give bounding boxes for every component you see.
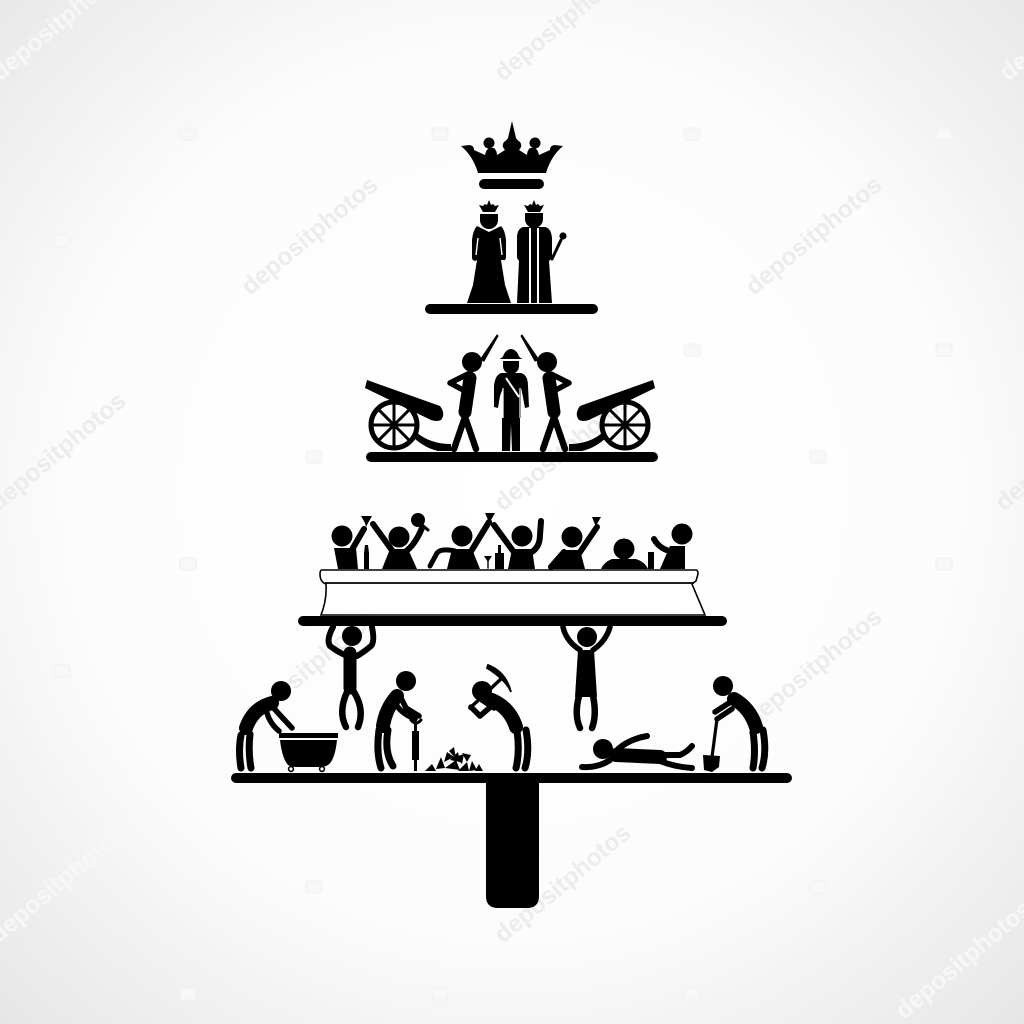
- figure: left soldier with rifle: [450, 335, 498, 449]
- diner 6 seated: [601, 538, 648, 569]
- watermark text: depositphotos: [237, 603, 383, 733]
- watermark text: depositphotos: [490, 387, 636, 517]
- figure: worker with pickaxe: [470, 665, 528, 768]
- figure: worker with jackhammer: [378, 671, 419, 768]
- table: [320, 570, 705, 615]
- figure: worker hanging from platform, right: [563, 627, 610, 728]
- tier 3 platform: [298, 616, 727, 626]
- watermark camera marks: [54, 128, 952, 1000]
- tier 1 platform: [425, 304, 598, 314]
- diner 5 with glass: [551, 517, 601, 569]
- banquet figures: [332, 513, 692, 569]
- icon: left cannon: [365, 380, 451, 451]
- diner 2 with drumstick: [373, 513, 428, 569]
- figure: right soldier with rifle: [521, 335, 569, 449]
- icon: shovel: [703, 719, 720, 772]
- figure: worker hanging from platform, left: [329, 626, 373, 727]
- diner 3 with raised glass: [430, 513, 504, 569]
- diner 1 with glass and bottle: [332, 516, 372, 569]
- figure: queen: [467, 200, 511, 303]
- diner 4 cheering: [494, 521, 541, 569]
- figure: officer: [494, 349, 529, 451]
- watermark text: depositphotos: [741, 603, 887, 733]
- icon: large crown: [461, 121, 563, 189]
- figure: king with sceptre: [517, 200, 567, 303]
- tier 2 platform: [366, 452, 658, 462]
- icon: jackhammer: [411, 720, 421, 771]
- watermark text: depositphotos: [237, 171, 383, 301]
- icon: pile of rocks: [425, 747, 483, 771]
- figure: worker with shovel: [713, 676, 765, 768]
- figure: worker with cart: [240, 681, 292, 768]
- icon: mine cart: [279, 733, 338, 771]
- icon: right cannon: [569, 380, 655, 451]
- tree trunk: [486, 780, 539, 908]
- figure: fallen worker lying down: [582, 736, 692, 768]
- watermark text: depositphotos: [741, 171, 887, 301]
- diner 7 with bottle: [648, 524, 692, 569]
- tier 4 platform: [231, 773, 792, 783]
- watermark text: depositphotos: [490, 819, 636, 949]
